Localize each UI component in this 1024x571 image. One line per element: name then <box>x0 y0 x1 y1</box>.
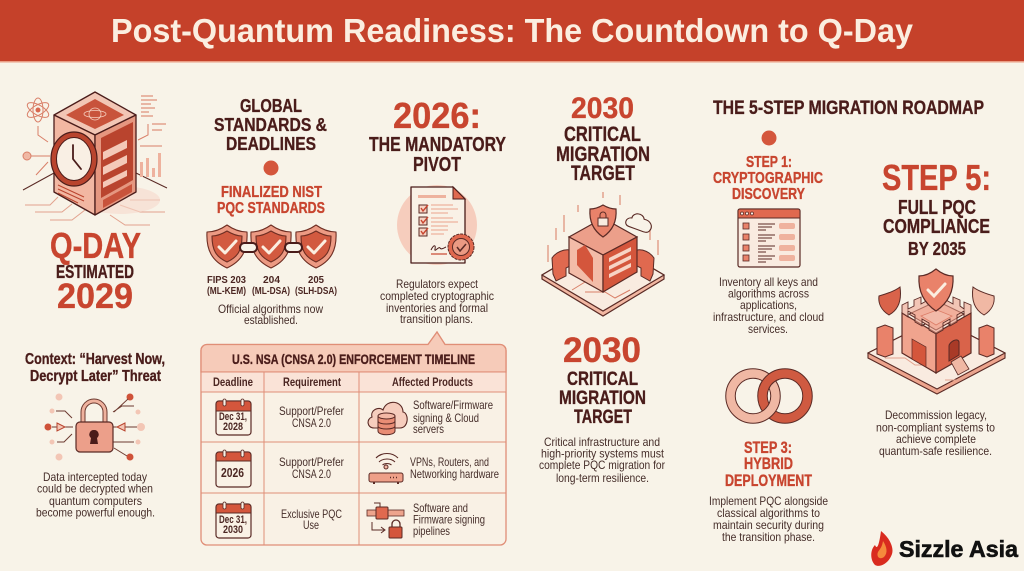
heading: estimated: ESTIMATED <box>56 262 134 282</box>
logo: Sizzle Asia: Sizzle Asia <box>899 536 1018 562</box>
heading: critical migration target upper: TARGET <box>571 162 635 185</box>
calendar: Dec 31, 2030: Dec 31, <box>219 514 247 526</box>
text: inventory: Inventory all keys and <box>719 275 818 289</box>
text: critical infrastructure: complete PQC migration for <box>539 458 665 472</box>
row: Dec 31, 2030 <box>216 501 485 538</box>
requirement <box>279 404 344 430</box>
icon: quantum server with clock <box>23 92 167 225</box>
text: hybrid: the transition phase. <box>722 530 815 544</box>
icon: pipeline with lock <box>367 503 404 538</box>
heading: global standards and deadlines: DEADLINES <box>226 133 316 154</box>
panel: 2026 mandatory pivot <box>369 95 507 326</box>
panel: 5-step migration roadmap <box>709 97 1005 544</box>
heading: critical migration target lower: MIGRATION <box>559 387 646 409</box>
calendar: Dec 31, 2028: 2028 <box>223 421 243 433</box>
affected products: Software/Firmware <box>413 398 493 412</box>
affected products: servers <box>413 422 444 436</box>
column headers: Requirement <box>283 375 341 389</box>
heading: step 3: HYBRID <box>744 455 793 473</box>
heading: the mandatory pivot <box>369 134 507 176</box>
heading: finalized NIST standards <box>217 184 325 217</box>
heading: context <box>25 351 165 385</box>
icon: signed checklist document <box>397 185 477 265</box>
calendar: Dec 31, 2028: Dec 31, <box>219 411 247 423</box>
title banner <box>0 0 1024 62</box>
timeline dot <box>264 160 278 176</box>
heading: 2029: 2029 <box>57 277 133 316</box>
text: context description: Data intercepted today <box>43 470 147 484</box>
text: regulators expect: Regulators expect <box>396 277 479 291</box>
heading: step 1: STEP 1: <box>746 154 792 171</box>
text: hybrid <box>709 494 828 544</box>
text: inventory: infrastructure, and cloud <box>713 310 824 324</box>
panel: NSA CNSA 2.0 enforcement timeline table <box>201 332 506 545</box>
icon: wifi router <box>369 454 403 484</box>
labels: FIPS standards: 204 <box>263 274 280 286</box>
heading: step 1: DISCOVERY <box>732 186 805 203</box>
row: Dec 31, 2028 <box>216 398 493 436</box>
heading: the mandatory pivot: THE MANDATORY <box>369 134 507 156</box>
row: 2026 <box>216 450 499 487</box>
text: critical infrastructure <box>539 435 665 485</box>
calendar: 2026: 2026 <box>221 465 244 480</box>
heading: global standards and deadlines: GLOBAL <box>240 95 302 116</box>
heading: step 1 <box>713 154 823 203</box>
heading: 2030 lower: 2030 <box>563 331 641 370</box>
icon: fortress with shields <box>868 269 1005 394</box>
title banner: Post-Quantum Readiness: The Countdown to Q-Day <box>111 12 914 49</box>
text: inventory <box>713 275 824 336</box>
text: context description: become powerful enough. <box>36 506 155 520</box>
heading: full PQC compliance: COMPLIANCE <box>883 216 990 238</box>
text: decommission: non-compliant systems to <box>876 420 995 434</box>
column headers: Affected Products <box>392 375 473 389</box>
text: regulators expect: transition plans. <box>400 312 473 326</box>
column headers <box>213 375 473 389</box>
requirement: CNSA 2.0 <box>292 416 331 430</box>
affected products: Networking hardware <box>410 467 499 481</box>
affected products <box>413 398 493 436</box>
panel: global standards <box>207 95 337 327</box>
labels: FIPS standards: FIPS 203 <box>207 274 246 286</box>
calendar: Dec 31, 2030 <box>216 502 251 538</box>
panel: 2030 critical migration target <box>539 92 665 485</box>
icon: secured data centre <box>542 192 664 316</box>
text: hybrid: maintain security during <box>713 518 824 532</box>
heading: full PQC compliance <box>883 197 990 259</box>
text: critical infrastructure: high-priority systems must <box>541 446 665 460</box>
requirement: Support/Prefer <box>279 404 344 418</box>
text: critical infrastructure: long-term resilience. <box>556 471 649 485</box>
icon: inventory window <box>738 209 800 267</box>
text: decommission: quantum-safe resilience. <box>879 444 992 458</box>
affected products: pipelines <box>413 524 450 538</box>
icon: three chained shields <box>207 225 336 268</box>
text: context description: quantum computers <box>49 494 142 508</box>
text: regulators expect: completed cryptographic <box>380 289 494 303</box>
heading: global standards and deadlines: STANDARDS & <box>214 114 327 135</box>
table title: U.S. NSA (CNSA 2.0) ENFORCEMENT TIMELINE <box>232 351 475 367</box>
text: decommission <box>876 408 995 458</box>
heading: Q-Day: Q-DAY <box>50 225 141 266</box>
heading: full PQC compliance: BY 2035 <box>908 239 966 259</box>
logo: Sizzle Asia <box>871 531 1018 566</box>
labels: FIPS standards: (ML-DSA) <box>252 285 290 297</box>
heading: the mandatory pivot: PIVOT <box>413 154 461 176</box>
text: critical infrastructure: Critical infrastructure and <box>544 435 660 449</box>
text: context description: could be decrypted when <box>37 482 153 496</box>
text: inventory: applications, <box>740 298 797 312</box>
labels: FIPS standards: 205 <box>308 274 324 286</box>
text: inventory: algorithms across <box>728 286 809 300</box>
text: regulators expect: inventories and formal <box>386 301 488 315</box>
text: context description <box>36 470 155 520</box>
heading: critical migration target lower: TARGET <box>574 406 632 428</box>
heading: 2030 upper: 2030 <box>571 92 634 125</box>
heading: global standards and deadlines <box>214 95 327 154</box>
labels: FIPS standards: (ML-KEM) <box>207 285 246 297</box>
heading: finalized NIST standards: FINALIZED NIST <box>221 184 322 201</box>
icon: padlock with data nodes <box>44 394 145 460</box>
heading: 2026: 2026: <box>393 95 481 136</box>
heading: critical migration target upper: CRITICAL <box>564 123 641 146</box>
affected products: Firmware signing <box>413 512 485 526</box>
heading: full PQC compliance: FULL PQC <box>898 197 976 219</box>
requirement: Support/Prefer <box>279 455 344 469</box>
heading: context: Context: “Harvest Now, <box>25 351 165 368</box>
panel: Q-Day <box>23 92 167 316</box>
affected products: VPNs, Routers, and <box>410 455 489 469</box>
text: hybrid: Implement PQC alongside <box>709 494 828 508</box>
affected products <box>413 501 485 538</box>
labels: FIPS standards <box>207 274 337 297</box>
affected products: signing & Cloud <box>413 411 479 425</box>
calendar: Dec 31, 2028 <box>216 399 251 435</box>
text: inventory: services. <box>748 322 788 336</box>
text: algorithms established: established. <box>244 313 298 327</box>
requirement: CNSA 2.0 <box>292 467 331 481</box>
text: regulators expect <box>380 277 494 326</box>
heading: step 3: DEPLOYMENT <box>725 472 812 490</box>
requirement: Use <box>303 518 319 532</box>
icon: cloud database <box>368 402 407 435</box>
text: decommission: Decommission legacy, <box>885 408 987 422</box>
heading: step 1: CRYPTOGRAPHIC <box>713 170 823 187</box>
calendar: Dec 31, 2030: 2030 <box>223 524 243 536</box>
heading: critical migration target upper <box>556 123 650 185</box>
heading: critical migration target upper: MIGRATION <box>556 143 650 166</box>
heading: critical migration target lower <box>559 368 646 428</box>
requirement: Exclusive PQC <box>281 507 342 521</box>
calendar: 2026 <box>216 450 251 487</box>
heading: step 3: STEP 3: <box>744 439 792 457</box>
timeline dot <box>762 130 776 146</box>
requirement <box>281 507 342 532</box>
column headers: Deadline <box>213 375 253 389</box>
text: algorithms established <box>218 302 323 327</box>
text: algorithms established: Official algorithms now <box>218 302 323 316</box>
heading: finalized NIST standards: PQC STANDARDS <box>217 200 325 217</box>
heading: critical migration target lower: CRITICAL <box>567 368 638 390</box>
requirement <box>279 455 344 481</box>
icon: interlocked rings <box>730 374 808 418</box>
text: hybrid: classical algorithms to <box>717 506 820 520</box>
panel: harvest now decrypt later <box>25 351 165 520</box>
affected products: Software and <box>413 501 468 515</box>
text: decommission: achieve complete <box>896 432 976 446</box>
heading: context: Decrypt Later” Threat <box>30 368 161 385</box>
affected products <box>410 455 499 481</box>
heading: step 3 <box>725 439 812 490</box>
labels: FIPS standards: (SLH-DSA) <box>295 285 337 297</box>
heading: step 5: STEP 5: <box>882 157 991 198</box>
